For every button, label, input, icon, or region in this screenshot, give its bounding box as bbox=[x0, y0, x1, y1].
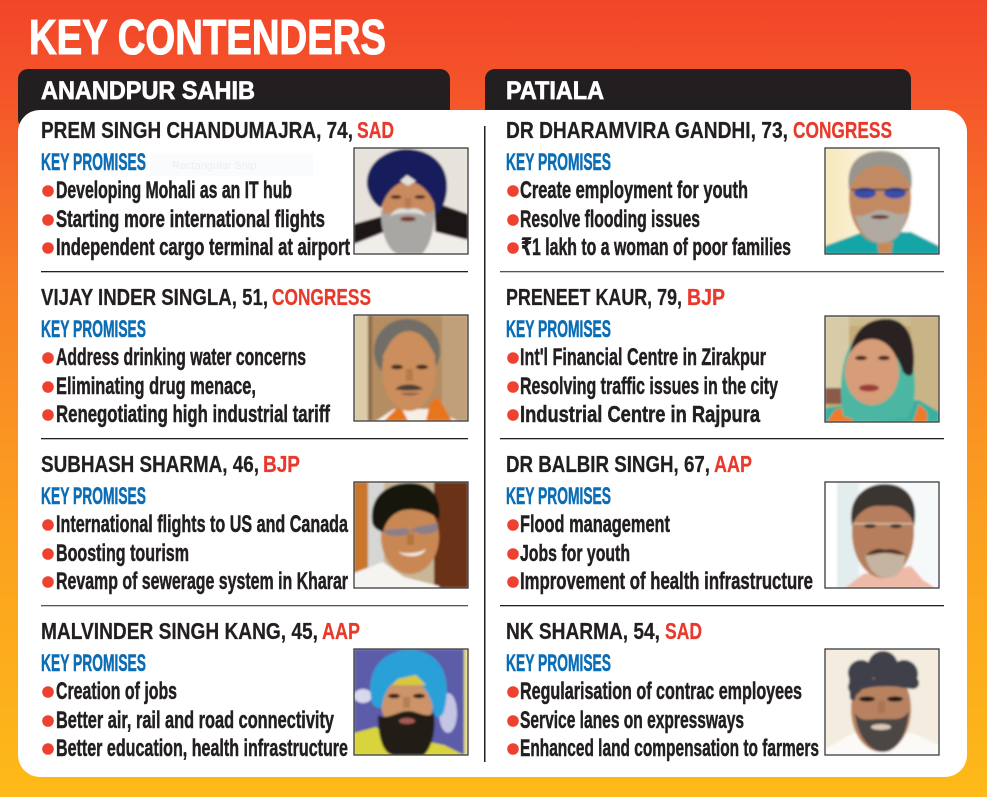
candidate: Dr Dharamvira Gandhi: Resolve flooding issues bbox=[520, 206, 700, 233]
divider bbox=[41, 271, 468, 272]
candidate: Malvinder Singh Kang bbox=[41, 618, 468, 762]
photo: Preneet Kaur bbox=[825, 316, 939, 422]
candidate: Dr Balbir Singh: Jobs for youth bbox=[520, 540, 630, 566]
candidate: Dr Balbir Singh: AAP bbox=[714, 451, 752, 477]
candidate: Dr Dharamvira Gandhi bbox=[506, 117, 939, 261]
candidate: Subhash Sharma bbox=[41, 451, 468, 595]
candidate: Malvinder Singh Kang: Better air, rail and road connectivity bbox=[56, 707, 334, 734]
title: KEY CONTENDERS bbox=[29, 11, 386, 65]
candidate: Dr Dharamvira Gandhi: KEY PROMISES bbox=[506, 149, 611, 176]
candidate: Vijay Inder Singla bbox=[41, 284, 468, 428]
candidate: Dr Dharamvira Gandhi: DR DHARAMVIRA GANDHI, 73, bbox=[506, 117, 788, 143]
candidate: Subhash Sharma: Revamp of sewerage system in Kharar bbox=[56, 568, 348, 595]
photo: Subhash Sharma bbox=[354, 482, 468, 588]
divider bbox=[41, 605, 468, 606]
candidate: Preneet Kaur: Int'l Financial Centre in Zirakpur bbox=[520, 344, 766, 371]
candidate: NK Sharma: NK SHARMA, 54, bbox=[506, 618, 660, 644]
candidate: Prem Singh Chandumajra: PREM SINGH CHANDUMAJRA, 74, bbox=[41, 117, 353, 143]
candidate: Malvinder Singh Kang: Creation of jobs bbox=[56, 678, 177, 705]
candidate: Preneet Kaur: KEY PROMISES bbox=[506, 316, 611, 343]
divider bbox=[500, 438, 944, 439]
divider bbox=[41, 438, 468, 439]
candidate: NK Sharma: SAD bbox=[665, 618, 702, 644]
faint snip label bbox=[150, 154, 313, 176]
divider bbox=[500, 605, 944, 606]
candidate: Dr Balbir Singh: KEY PROMISES bbox=[506, 483, 611, 510]
candidate: Subhash Sharma: SUBHASH SHARMA, 46, bbox=[41, 451, 259, 477]
photo: NK Sharma bbox=[825, 649, 939, 755]
candidate: Malvinder Singh Kang: Better education, health infrastructure bbox=[56, 735, 348, 762]
candidate: Preneet Kaur: Resolving traffic issues in the city bbox=[520, 373, 778, 400]
photo: Prem Singh Chandumajra bbox=[354, 148, 468, 254]
candidate: Subhash Sharma: KEY PROMISES bbox=[41, 483, 146, 510]
candidate: Malvinder Singh Kang: AAP bbox=[322, 618, 360, 644]
header tab: Patiala: PATIALA bbox=[506, 77, 604, 105]
header tab: Anandpur Sahib bbox=[18, 69, 450, 129]
candidate: Prem Singh Chandumajra: SAD bbox=[357, 117, 394, 143]
faint snip label: Rectangular Snip bbox=[172, 160, 256, 172]
candidate: Vijay Inder Singla: Eliminating drug menace, bbox=[56, 373, 256, 400]
candidate: Malvinder Singh Kang: MALVINDER SINGH KANG, 45, bbox=[41, 618, 318, 644]
candidate: NK Sharma: KEY PROMISES bbox=[506, 650, 611, 677]
candidate: Vijay Inder Singla: Address drinking water concerns bbox=[56, 344, 306, 371]
header tab: Anandpur Sahib: ANANDPUR SAHIB bbox=[41, 77, 255, 105]
candidate: Malvinder Singh Kang: KEY PROMISES bbox=[41, 650, 146, 677]
candidate: Subhash Sharma: International flights to US and Canada bbox=[56, 511, 348, 538]
candidate: Vijay Inder Singla: KEY PROMISES bbox=[41, 316, 146, 343]
photo: Dr Balbir Singh bbox=[825, 482, 939, 588]
candidate: Dr Balbir Singh: Improvement of health infrastructure bbox=[520, 568, 813, 595]
candidate: Preneet Kaur: PRENEET KAUR, 79, bbox=[506, 284, 682, 310]
candidate: NK Sharma: Enhanced land compensation to farmers bbox=[520, 735, 819, 762]
candidate: Dr Dharamvira Gandhi: Create employment for youth bbox=[520, 177, 748, 204]
candidate: Dr Balbir Singh: DR BALBIR SINGH, 67, bbox=[506, 451, 710, 477]
photo: Malvinder Singh Kang bbox=[354, 649, 468, 755]
candidate: Subhash Sharma: BJP bbox=[263, 451, 300, 477]
candidate: NK Sharma bbox=[506, 618, 939, 762]
candidate: Prem Singh Chandumajra bbox=[41, 117, 468, 261]
candidate: Prem Singh Chandumajra: Developing Mohali as an IT hub bbox=[56, 177, 292, 204]
candidate: Vijay Inder Singla: VIJAY INDER SINGLA, 51, bbox=[41, 284, 268, 310]
candidate: Dr Balbir Singh: Flood management bbox=[520, 511, 670, 538]
candidate: Vijay Inder Singla: Renegotiating high industrial tariff bbox=[56, 401, 331, 428]
photo: Vijay Inder Singla bbox=[354, 315, 468, 421]
candidate: Prem Singh Chandumajra: KEY PROMISES bbox=[41, 149, 146, 176]
candidate: Preneet Kaur: Industrial Centre in Rajpura bbox=[520, 401, 760, 427]
candidate: Subhash Sharma: Boosting tourism bbox=[56, 540, 189, 567]
header tab: Patiala bbox=[485, 69, 911, 129]
candidate: Prem Singh Chandumajra: Independent cargo terminal at airport bbox=[56, 234, 350, 261]
candidate: Preneet Kaur: BJP bbox=[687, 284, 725, 310]
candidate: NK Sharma: Service lanes on expressways bbox=[520, 707, 744, 734]
divider bbox=[500, 271, 944, 272]
column divider bbox=[484, 126, 486, 762]
candidate: Dr Dharamvira Gandhi: ₹1 lakh to a woman of poor families bbox=[521, 234, 791, 261]
photo: Dr Dharamvira Gandhi bbox=[825, 148, 939, 254]
candidate: NK Sharma: Regularisation of contrac employees bbox=[520, 678, 802, 705]
candidate: Dr Balbir Singh bbox=[506, 451, 939, 595]
candidate: Prem Singh Chandumajra: Starting more international flights bbox=[56, 206, 325, 233]
candidate: Preneet Kaur bbox=[506, 284, 939, 427]
candidate: Vijay Inder Singla: CONGRESS bbox=[272, 284, 371, 310]
candidate: Dr Dharamvira Gandhi: CONGRESS bbox=[793, 117, 892, 143]
